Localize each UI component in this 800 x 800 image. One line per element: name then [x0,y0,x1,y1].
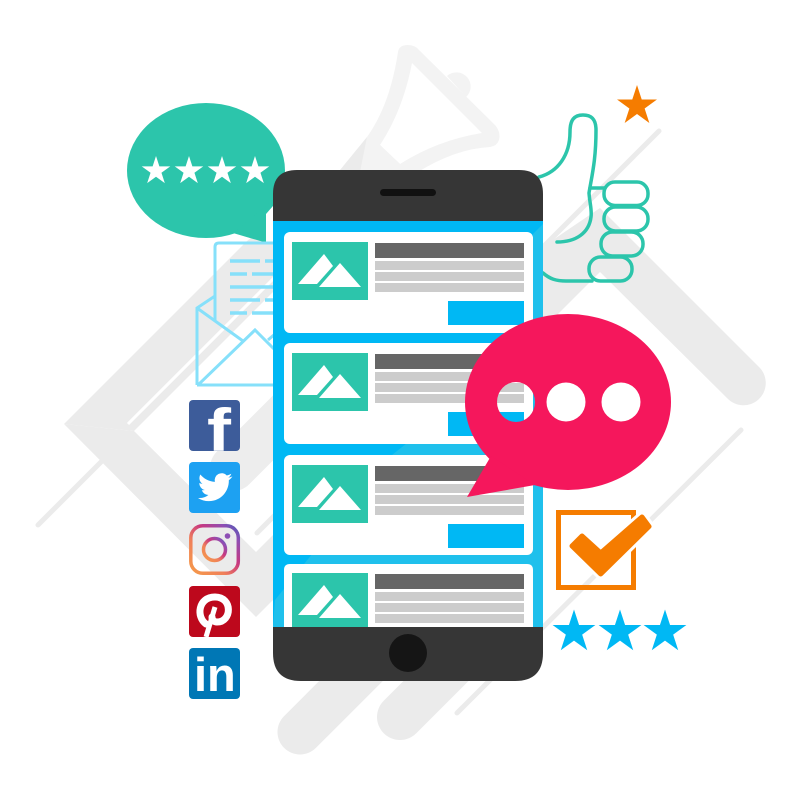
phone body [273,170,543,681]
icon: pinterest [189,586,240,637]
icon: orange star [617,85,657,123]
home button [389,634,427,672]
megaphone watermark [360,45,500,172]
card 4 [284,564,533,627]
card 2 [284,343,533,444]
card 3 [284,455,533,555]
teal speech bubble with four stars [127,103,285,244]
icon: checkbox with check mark [558,512,649,588]
screen [273,221,543,627]
icon: facebook: f [207,398,232,465]
three blue stars [553,610,686,650]
icon: instagram [191,526,238,573]
phone [273,170,543,681]
pink speech bubble [465,314,671,497]
icon: twitter [189,462,240,513]
speaker [380,189,436,196]
card 1 [284,232,533,333]
icon: linkedin: in [194,648,236,701]
icon: facebook [189,398,240,465]
icon: envelope with letter [197,243,275,385]
icon: thumbs up [539,115,648,281]
background grey shapes [38,131,766,732]
